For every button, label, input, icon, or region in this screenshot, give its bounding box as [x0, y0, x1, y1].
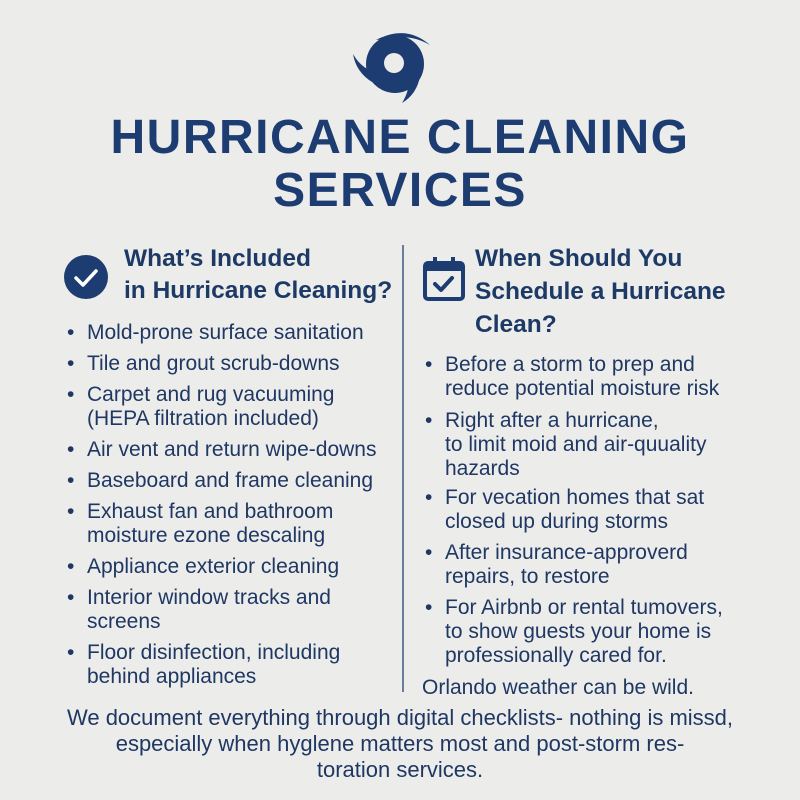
bullet list: [67, 321, 376, 688]
panel: when to schedule: to show guests your home is: [445, 620, 711, 643]
panel: what's included: behind appliances: [87, 665, 256, 688]
divider: [402, 245, 404, 692]
footer text: toration services.: [317, 757, 483, 782]
panel: when to schedule: hazards: [445, 457, 520, 480]
footer text: [67, 705, 733, 782]
panel: what's included: Carpet and rug vacuuming: [87, 383, 334, 406]
panel: what's included: Tile and grout scrub-downs: [87, 352, 340, 375]
panel: when to schedule: •: [425, 596, 432, 619]
panel: what's included: Interior window tracks and: [87, 586, 331, 609]
panel: what's included: moisture ezone descaling: [87, 524, 325, 547]
heading: [124, 245, 392, 304]
title: HURRICANE CLEANING: [110, 111, 690, 164]
icon: calendar: [423, 257, 465, 301]
panel: when to schedule: After insurance-approverd: [445, 541, 688, 564]
footer text: We document everything through digital checklists- nothing is missd,: [67, 705, 733, 730]
panel: what's included: [64, 245, 392, 688]
icon: check circle: [64, 255, 108, 299]
panel: when to schedule: repairs, to restore: [445, 565, 610, 588]
panel: what's included: Exhaust fan and bathroom: [87, 500, 333, 523]
panel: what's included: •: [67, 555, 74, 578]
panel: what's included: Appliance exterior cleaning: [87, 555, 339, 578]
bullet list: [425, 353, 723, 667]
panel: when to schedule: reduce potential moisture risk: [445, 377, 719, 400]
panel: when to schedule: For vecation homes that sat: [445, 486, 704, 509]
panel: when to schedule: closed up during storms: [445, 510, 668, 533]
heading: [475, 245, 726, 338]
title: [110, 111, 690, 217]
panel: what's included: Air vent and return wipe-downs: [87, 438, 376, 461]
panel: what's included: •: [67, 586, 74, 609]
panel: what's included: •: [67, 383, 74, 406]
heading: When Should You: [475, 245, 682, 272]
panel: when to schedule: •: [425, 486, 432, 509]
note: Orlando weather can be wild.: [422, 676, 694, 699]
panel: what's included: •: [67, 500, 74, 523]
title: SERVICES: [273, 164, 527, 217]
panel: when to schedule: Before a storm to prep and: [445, 353, 695, 376]
panel: what's included: Floor disinfection, including: [87, 641, 340, 664]
panel: what's included: screens: [87, 610, 161, 633]
panel: when to schedule: •: [425, 541, 432, 564]
footer text: especially when hyglene matters most and post-storm res-: [116, 731, 684, 756]
panel: what's included: Baseboard and frame cleaning: [87, 469, 373, 492]
panel: when to schedule: •: [425, 353, 432, 376]
panel: what's included: •: [67, 352, 74, 375]
panel: when to schedule: professionally cared for.: [445, 644, 667, 667]
panel: what's included: (HEPA filtration included): [87, 407, 319, 430]
panel: when to schedule: •: [425, 409, 432, 432]
panel: what's included: •: [67, 321, 74, 344]
icon: hurricane: [353, 33, 430, 103]
panel: when to schedule: Right after a hurricane,: [445, 409, 659, 432]
panel: when to schedule: For Airbnb or rental tumovers,: [445, 596, 723, 619]
panel: when to schedule: to limit moid and air-quuality: [445, 433, 706, 456]
panel: when to schedule: [422, 245, 726, 699]
panel: what's included: Mold-prone surface sanitation: [87, 321, 364, 344]
heading: What’s Included: [124, 245, 311, 272]
heading: in Hurricane Cleaning?: [124, 277, 392, 304]
heading: Schedule a Hurricane: [475, 278, 726, 305]
panel: what's included: •: [67, 469, 74, 492]
heading: Clean?: [475, 311, 557, 338]
panel: what's included: •: [67, 438, 74, 461]
panel: what's included: •: [67, 641, 74, 664]
